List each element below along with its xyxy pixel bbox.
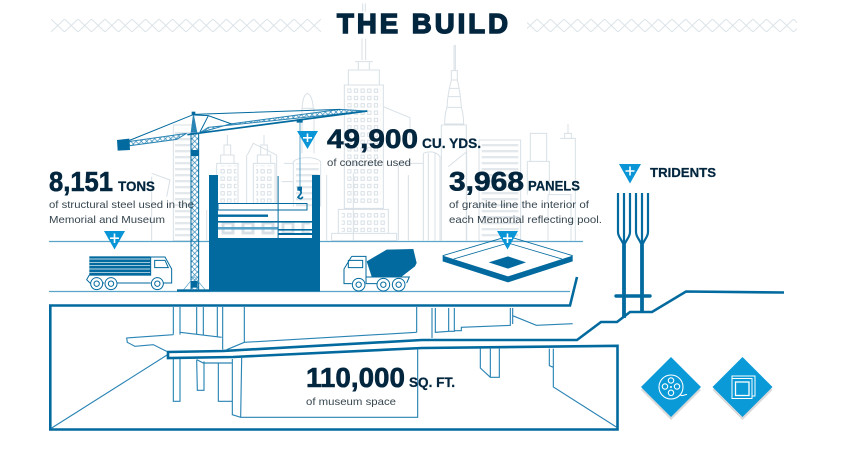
stat: concrete <box>327 124 481 169</box>
underground structure outlines <box>50 277 784 430</box>
building: central tower <box>282 93 321 207</box>
street line <box>49 290 570 292</box>
right side lower outlines <box>480 349 616 427</box>
truck: concrete mixer <box>344 249 417 291</box>
stat: granite panels: each Memorial reflecting pool. <box>449 214 602 226</box>
skyline background <box>152 3 575 241</box>
trident: left <box>618 193 630 318</box>
crane mast <box>177 112 210 292</box>
building: striped left tower <box>152 125 207 241</box>
lower level thin outlines <box>52 350 418 428</box>
stat: granite panels: PANELS <box>528 178 580 194</box>
stat: concrete: of concrete used <box>327 157 411 169</box>
reflecting pool <box>443 236 573 282</box>
stat: steel tons <box>49 166 194 226</box>
stat: museum space: 110,000 <box>306 362 405 393</box>
trident crossbar <box>616 294 650 298</box>
tridents <box>616 193 650 318</box>
building: chrysler <box>441 45 466 241</box>
stat: steel tons: TONS <box>118 179 155 194</box>
buildings: twin towers <box>217 135 277 203</box>
right side upper outlines <box>432 308 573 338</box>
stat: concrete: 49,900 <box>327 124 418 154</box>
crane hook <box>297 119 303 199</box>
label: tridents: TRIDENTS <box>650 165 716 180</box>
stat: museum space: SQ. FT. <box>409 375 455 390</box>
stat: steel tons: 8,151 <box>49 166 113 197</box>
building: striped right tower <box>479 140 521 241</box>
marker: concrete <box>297 131 318 149</box>
ground line <box>49 240 583 242</box>
excavation block <box>209 175 320 292</box>
stat: granite panels <box>449 166 602 226</box>
heavy foundation outline <box>50 277 784 430</box>
building: empire state <box>332 3 397 241</box>
crane jib <box>117 109 367 151</box>
stat: concrete: CU. YDS. <box>422 136 481 151</box>
marker: tridents <box>619 164 641 184</box>
marker: steel <box>104 231 125 250</box>
trident: right <box>636 193 648 312</box>
stat: granite panels: of granite line the interior of <box>449 199 589 211</box>
stat: museum space <box>306 362 455 408</box>
stat: granite panels: 3,968 <box>449 166 524 196</box>
stat: steel tons: Memorial and Museum <box>49 214 165 226</box>
icon: photo frames diamond <box>712 357 772 420</box>
stat: museum space: of museum space <box>306 396 396 408</box>
upper level thin outlines <box>127 307 417 351</box>
decorative band: left cross pattern <box>51 19 321 32</box>
truck: steel <box>87 256 172 290</box>
buildings: mid skyline <box>327 107 467 241</box>
tower crane <box>117 109 367 292</box>
icon: film reel diamond <box>641 357 701 420</box>
buildings: far right towers <box>527 124 575 241</box>
stat: steel tons: of structural steel used in the <box>49 199 194 211</box>
decorative band: right cross pattern <box>527 19 797 32</box>
title: THE BUILD <box>337 8 508 39</box>
marker: panels <box>497 231 518 250</box>
